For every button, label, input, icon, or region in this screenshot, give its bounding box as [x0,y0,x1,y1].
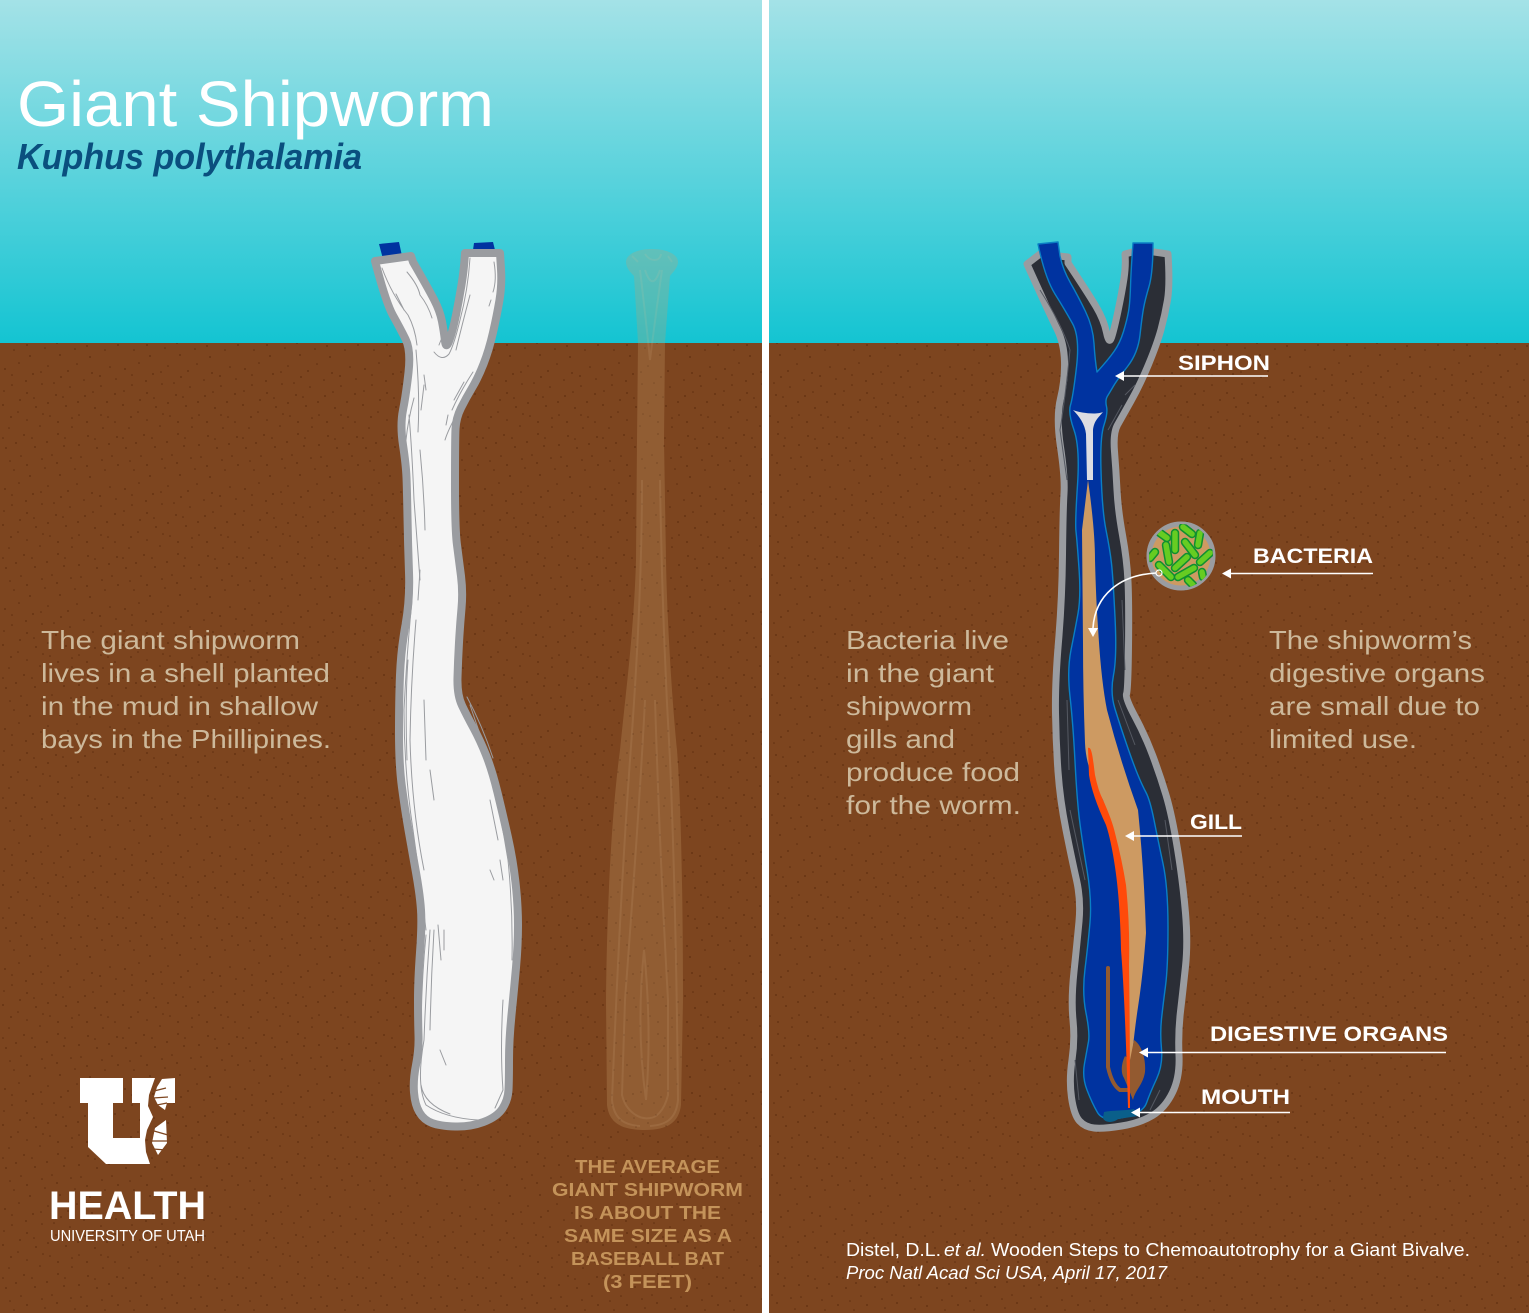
body text: bacteria: gills and [846,724,955,754]
logo wordmark University of Utah: UNIVERSITY OF UTAH [50,1228,205,1245]
body text: digestive organs: are small due to [1269,691,1480,721]
shell growth lines [382,258,512,1120]
body text: digestive organs: limited use. [1269,724,1417,754]
body text: bacteria: Bacteria live [846,625,1009,655]
bat size caption: (3 FEET) [603,1271,692,1292]
curved arrow to gill [1088,570,1162,637]
label: siphon [1115,352,1270,381]
gill [1082,480,1146,1090]
mouth [1103,1109,1138,1122]
body text: digestive organs: digestive organs [1269,658,1485,688]
panel: left scene [0,0,762,1313]
bat size caption: THE AVERAGE [575,1156,720,1177]
panel: right scene [769,0,1529,1313]
body text: bacteria: produce food [846,757,1020,787]
body text: bacteria: shipworm [846,691,972,721]
ground left [0,343,762,1313]
body text: habitat: in the mud in shallow [41,691,318,721]
citation: et al. [944,1240,986,1260]
dark mantle lines [1040,290,1172,1110]
body text: bacteria: in the giant [846,658,995,688]
citation: Wooden Steps to Chemoautotrophy for a Giant Bivalve. [991,1240,1470,1260]
outer shell [1027,250,1187,1128]
citation: Proc Natl Acad Sci USA, April 17, 2017 [846,1263,1168,1283]
body text: bacteria [846,625,1021,820]
subtitle: scientific name: Kuphus polythalamia [17,136,362,177]
illustration: baseball bat [606,249,683,1130]
logo block U [80,1078,155,1164]
body text: habitat [41,625,331,754]
illustration: shipworm shell exterior [375,242,518,1127]
sky right [769,0,1529,343]
shell body [375,253,518,1127]
siphon tip right [473,242,495,250]
body cavity [1038,242,1168,1119]
siphon tip left [379,242,402,259]
sky left [0,0,762,343]
magnified circle [1149,524,1213,588]
siphon tissue [1073,410,1103,480]
digestive tube [1108,968,1128,1090]
label: digestive organs: DIGESTIVE ORGANS [1210,1023,1448,1046]
body text: habitat: bays in the Phillipines. [41,724,331,754]
logo DNA helix [152,1078,175,1155]
bat silhouette [606,249,683,1130]
body text: habitat: The giant shipworm [41,625,300,655]
ground right [769,343,1529,1313]
bacteria callout [1088,524,1213,637]
label: bacteria [1222,545,1373,578]
label: gill [1125,811,1242,841]
label: digestive organs [1139,1023,1448,1058]
bat size caption: IS ABOUT THE [574,1202,721,1223]
digestive organs [1122,1040,1145,1100]
body text: digestive organs: The shipworm’s [1269,625,1472,655]
bat size caption: SAME SIZE AS A [564,1225,732,1246]
citation: Distel, D.L. [846,1240,941,1260]
body text: bacteria: for the worm. [846,790,1021,820]
label: bacteria: BACTERIA [1253,545,1373,568]
title: Giant Shipworm [17,68,494,140]
illustration: shipworm cross section [1027,242,1187,1128]
citation [846,1240,1470,1283]
body text: digestive organs [1269,625,1485,754]
label: siphon: SIPHON [1178,352,1270,375]
bat size caption: GIANT SHIPWORM [552,1179,743,1200]
bacteria cells [1150,527,1210,585]
label: mouth: MOUTH [1201,1086,1290,1109]
bat size caption: BASEBALL BAT [571,1248,725,1269]
bat size caption [552,1156,743,1292]
label: gill: GILL [1190,811,1242,834]
orange organ [1088,748,1130,1108]
logo: University of Utah Health [49,1078,206,1245]
bat wood grain [612,254,678,1126]
label: mouth [1131,1086,1290,1118]
logo wordmark HEALTH: HEALTH [49,1184,206,1228]
body text: habitat: lives in a shell planted [41,658,330,688]
